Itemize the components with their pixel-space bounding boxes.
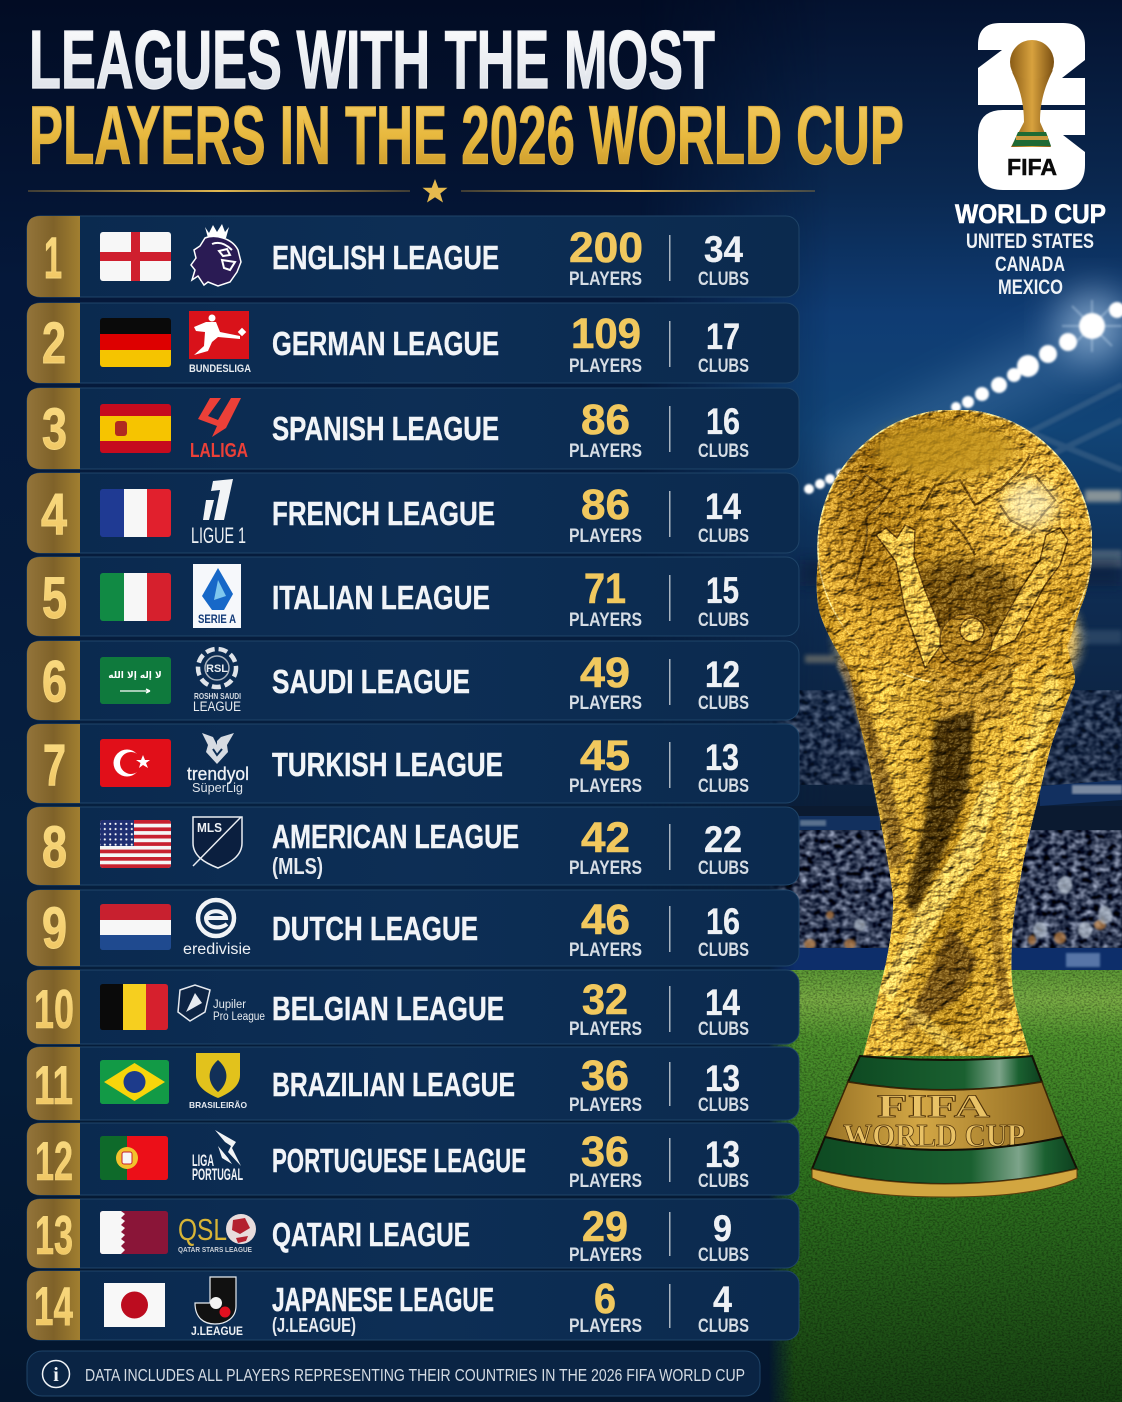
- flag: Italy: [100, 573, 171, 621]
- row 8: American league: 42: [581, 814, 630, 862]
- logo: Eredivisie: eredivisie: [183, 941, 251, 958]
- row 8: American league: AMERICAN LEAGUE: [272, 819, 519, 856]
- flag: Qatar: [100, 1211, 168, 1254]
- row 3: Spanish league: PLAYERS: [569, 440, 642, 462]
- row 10: Belgian league: [27, 970, 799, 1044]
- row 11: Brazilian league: [27, 1047, 799, 1120]
- row 6: Saudi league: PLAYERS: [569, 692, 642, 714]
- row 14: Japanese league: 6: [594, 1275, 616, 1323]
- row 14: Japanese league: [27, 1271, 799, 1340]
- row 10: Belgian league: BELGIAN LEAGUE: [272, 991, 504, 1028]
- footnote bar: [27, 1351, 760, 1396]
- row 9: Dutch league: DUTCH LEAGUE: [272, 911, 478, 948]
- trophy gold rim: [812, 1169, 1077, 1197]
- row 9: Dutch league: PLAYERS: [569, 939, 642, 961]
- row 3: Spanish league: 86: [581, 396, 630, 444]
- flag: Spain: [100, 404, 171, 453]
- FIFA World Cup 2026 logo: [955, 23, 1106, 299]
- row 2: German league: 109: [571, 310, 641, 358]
- logo numeral 6: [978, 110, 1085, 190]
- row 13: Qatari league: 9: [713, 1208, 732, 1249]
- icon: info: i: [53, 1364, 59, 1386]
- flag: Saudi Arabia: لا إله إلا الله: [108, 671, 162, 681]
- logo: Trendyol Super Lig: SüperLig: [192, 780, 243, 795]
- logo: Ligue 1: LIGUE 1: [191, 523, 246, 548]
- logo: MLS: MLS: [197, 820, 222, 835]
- row 1: English league: ENGLISH LEAGUE: [272, 240, 499, 277]
- row 12: Portuguese league: 12: [35, 1130, 73, 1192]
- row 12: Portuguese league: PLAYERS: [569, 1170, 642, 1192]
- logo: Trendyol Super Lig: [187, 733, 249, 795]
- trophy gold inscription band: [825, 1082, 1063, 1150]
- row 10: Belgian league: CLUBS: [698, 1018, 749, 1040]
- flag: United States: [100, 820, 171, 868]
- row 6: Saudi league: CLUBS: [698, 692, 749, 714]
- logo: J.League: [191, 1277, 243, 1338]
- row 6: Saudi league: 49: [580, 649, 630, 697]
- row 8: American league: (MLS): [272, 853, 323, 879]
- row 12: Portuguese league: PORTUGUESE LEAGUE: [272, 1143, 526, 1180]
- flag: Brazil: [100, 1060, 169, 1104]
- row 7: Turkish league: PLAYERS: [569, 775, 642, 797]
- trophy globe: [818, 410, 1092, 684]
- row 5: Italian league: 15: [706, 570, 739, 611]
- row 6: Saudi league: [27, 641, 799, 720]
- logo: Jupiler Pro League: Jupiler: [213, 999, 246, 1011]
- row 7: Turkish league: [27, 724, 799, 803]
- row 4: French league: 4: [41, 482, 67, 547]
- title line 1: LEAGUES WITH THE MOST: [29, 13, 715, 106]
- logo: Serie A: SERIE A: [198, 614, 236, 626]
- row 12: Portuguese league: CLUBS: [698, 1170, 749, 1192]
- row 1: English league: 1: [44, 226, 62, 291]
- row 11: Brazilian league: PLAYERS: [569, 1094, 642, 1116]
- row 11: Brazilian league: 36: [581, 1052, 629, 1100]
- flag: Japan: [104, 1283, 165, 1327]
- trophy figure arms and head: [876, 525, 1068, 735]
- footnote text: DATA INCLUDES ALL PLAYERS REPRESENTING THEIR COUNTRIES IN THE 2026 FIFA WORLD CUP: [85, 1365, 745, 1385]
- row 10: Belgian league: 10: [34, 978, 74, 1040]
- row 12: Portuguese league: 36: [581, 1128, 629, 1176]
- row 9: Dutch league: 46: [581, 896, 630, 944]
- row 6: Saudi league: 12: [705, 654, 740, 695]
- crowd warm highlights: [804, 911, 1106, 949]
- logo: Serie A: [193, 564, 241, 628]
- logo: Jupiler Pro League: Pro League: [213, 1011, 265, 1023]
- row 14: Japanese league: JAPANESE LEAGUE: [272, 1282, 494, 1319]
- host: Mexico: MEXICO: [998, 276, 1063, 299]
- trophy upper green band: [848, 1056, 1042, 1090]
- host: Canada: CANADA: [995, 253, 1065, 276]
- row 11: Brazilian league: 11: [34, 1054, 73, 1116]
- row 12: Portuguese league: [27, 1123, 799, 1195]
- row 1: English league: PLAYERS: [569, 268, 642, 290]
- row 4: French league: 14: [705, 486, 741, 527]
- row 7: Turkish league: 7: [43, 733, 66, 798]
- row 8: American league: PLAYERS: [569, 857, 642, 879]
- logo: LaLiga: LALIGA: [190, 440, 248, 462]
- row 2: German league: PLAYERS: [569, 355, 642, 377]
- trophy upper textured metal: globe, figure and drapery: [817, 410, 1092, 1056]
- logo: Qatar Stars League: [178, 1212, 256, 1254]
- logo: Roshn Saudi League: LEAGUE: [193, 699, 241, 714]
- logo mini trophy: [1010, 40, 1054, 147]
- logo: MLS: [193, 817, 242, 868]
- flag: Saudi Arabia: [100, 657, 171, 704]
- row 5: Italian league: ITALIAN LEAGUE: [272, 580, 490, 617]
- logo: Premier League: [191, 224, 241, 286]
- logo: Roshn Saudi League: ROSHN SAUDI: [194, 691, 241, 701]
- row 4: French league: CLUBS: [698, 525, 749, 547]
- row 8: American league: 22: [704, 819, 742, 860]
- logo: Brasileirao: BRASILEIRÃO: [189, 1100, 247, 1110]
- logo: Brasileirao: [189, 1053, 247, 1110]
- row 9: Dutch league: CLUBS: [698, 939, 749, 961]
- trophy drapery folds: [905, 712, 975, 915]
- row 1: English league: [27, 216, 799, 297]
- row 4: French league: [27, 473, 799, 553]
- stadium background: [750, 385, 1122, 1402]
- row 9: Dutch league: [27, 890, 799, 966]
- row 14: Japanese league: (J.LEAGUE): [272, 1315, 356, 1337]
- row 14: Japanese league: 14: [34, 1275, 73, 1337]
- logo: Bundesliga: [189, 311, 251, 375]
- logo: Trendyol Super Lig: trendyol: [187, 764, 249, 784]
- row 11: Brazilian league: BRAZILIAN LEAGUE: [272, 1067, 515, 1104]
- row 2: German league: CLUBS: [698, 355, 749, 377]
- flag: Germany: [100, 318, 171, 367]
- trophy globe smooth cap: [875, 422, 1015, 478]
- row 4: French league: 86: [581, 481, 630, 529]
- flag: France: [100, 489, 171, 537]
- row 13: Qatari league: QATARI LEAGUE: [272, 1217, 470, 1254]
- row 11: Brazilian league: 13: [705, 1058, 740, 1099]
- trophy globe highlight: [1004, 483, 1056, 527]
- flag: Netherlands: [100, 904, 171, 950]
- flag: Turkey: [100, 739, 171, 787]
- logo: Qatar Stars League: QATAR STARS LEAGUE: [178, 1245, 252, 1254]
- logo: Liga Portugal: PORTUGAL: [192, 1165, 243, 1184]
- trophy inscription: [843, 1089, 1025, 1153]
- row 14: Japanese league: PLAYERS: [569, 1315, 642, 1337]
- row 3: Spanish league: SPANISH LEAGUE: [272, 411, 499, 448]
- logo: Roshn Saudi League: [193, 649, 241, 714]
- row 9: Dutch league: 16: [706, 901, 740, 942]
- row 7: Turkish league: 45: [580, 732, 630, 780]
- logo: Jupiler Pro League: [178, 985, 265, 1023]
- title: [29, 13, 904, 182]
- row 10: Belgian league: PLAYERS: [569, 1018, 642, 1040]
- stadium sky: [668, 0, 1122, 690]
- trophy inscription: WORLD CUP: [843, 1117, 1025, 1153]
- flag: Belgium: [100, 984, 168, 1030]
- row 2: German league: [27, 303, 799, 383]
- row 7: Turkish league: 13: [705, 737, 739, 778]
- row 5: Italian league: CLUBS: [698, 609, 749, 631]
- logo: Eredivisie: [183, 900, 251, 958]
- logo: LaLiga: [190, 398, 248, 462]
- row 3: Spanish league: CLUBS: [698, 440, 749, 462]
- row 12: Portuguese league: 13: [705, 1134, 740, 1175]
- logo: Bundesliga: BUNDESLIGA: [189, 363, 251, 375]
- flag: Portugal: [100, 1136, 168, 1180]
- row 8: American league: CLUBS: [698, 857, 749, 879]
- row 3: Spanish league: 16: [706, 401, 740, 442]
- row 7: Turkish league: CLUBS: [698, 775, 749, 797]
- logo: Liga Portugal: [192, 1130, 243, 1184]
- row 13: Qatari league: CLUBS: [698, 1244, 749, 1266]
- row 14: Japanese league: 4: [713, 1279, 732, 1320]
- row 14: Japanese league: CLUBS: [698, 1315, 749, 1337]
- row 10: Belgian league: 32: [582, 976, 628, 1024]
- flag: England: [100, 232, 171, 281]
- icon: info: [42, 1360, 70, 1388]
- divider with star: [28, 179, 815, 202]
- logo numeral 2: [978, 23, 1085, 105]
- row 8: American league: [27, 807, 799, 885]
- trophy: [812, 410, 1092, 1197]
- logo: Ligue 1: [191, 479, 246, 548]
- world cup wording: WORLD CUP: [955, 199, 1106, 229]
- row 13: Qatari league: 29: [582, 1203, 628, 1251]
- row 3: Spanish league: [27, 388, 799, 469]
- logo: J.League: J.LEAGUE: [191, 1326, 243, 1338]
- trophy lower green band: [812, 1137, 1077, 1184]
- logo: Qatar Stars League: QSL: [178, 1212, 227, 1247]
- row 5: Italian league: 71: [584, 565, 626, 613]
- logo FIFA wordmark: FIFA: [1007, 154, 1057, 180]
- row 7: Turkish league: TURKISH LEAGUE: [272, 747, 503, 784]
- row 13: Qatari league: PLAYERS: [569, 1244, 642, 1266]
- row 10: Belgian league: 14: [705, 982, 740, 1023]
- trophy inscription: FIFA: [877, 1089, 990, 1125]
- stadium floodlights: [804, 290, 1122, 505]
- row 1: English league: 34: [704, 229, 743, 270]
- row 8: American league: 8: [42, 815, 67, 880]
- row 4: French league: FRENCH LEAGUE: [272, 496, 495, 533]
- row 2: German league: 17: [706, 316, 740, 357]
- row 2: German league: GERMAN LEAGUE: [272, 326, 499, 363]
- row 1: English league: CLUBS: [698, 268, 749, 290]
- row 13: Qatari league: [27, 1199, 799, 1268]
- row 3: Spanish league: 3: [42, 397, 67, 462]
- row 13: Qatari league: 13: [35, 1204, 73, 1266]
- row 11: Brazilian league: CLUBS: [698, 1094, 749, 1116]
- logo: Roshn Saudi League: RSL: [206, 663, 228, 675]
- row 9: Dutch league: 9: [42, 896, 67, 961]
- row 6: Saudi league: SAUDI LEAGUE: [272, 664, 470, 701]
- row 5: Italian league: [27, 557, 799, 636]
- row 6: Saudi league: 6: [42, 650, 67, 714]
- row 2: German league: 2: [42, 311, 66, 376]
- row 1: English league: 200: [569, 224, 643, 272]
- logo: Liga Portugal: LIGA: [192, 1151, 214, 1170]
- row 4: French league: PLAYERS: [569, 525, 642, 547]
- row 5: Italian league: PLAYERS: [569, 609, 642, 631]
- row 5: Italian league: 5: [42, 566, 67, 631]
- trophy continents: [850, 455, 1055, 585]
